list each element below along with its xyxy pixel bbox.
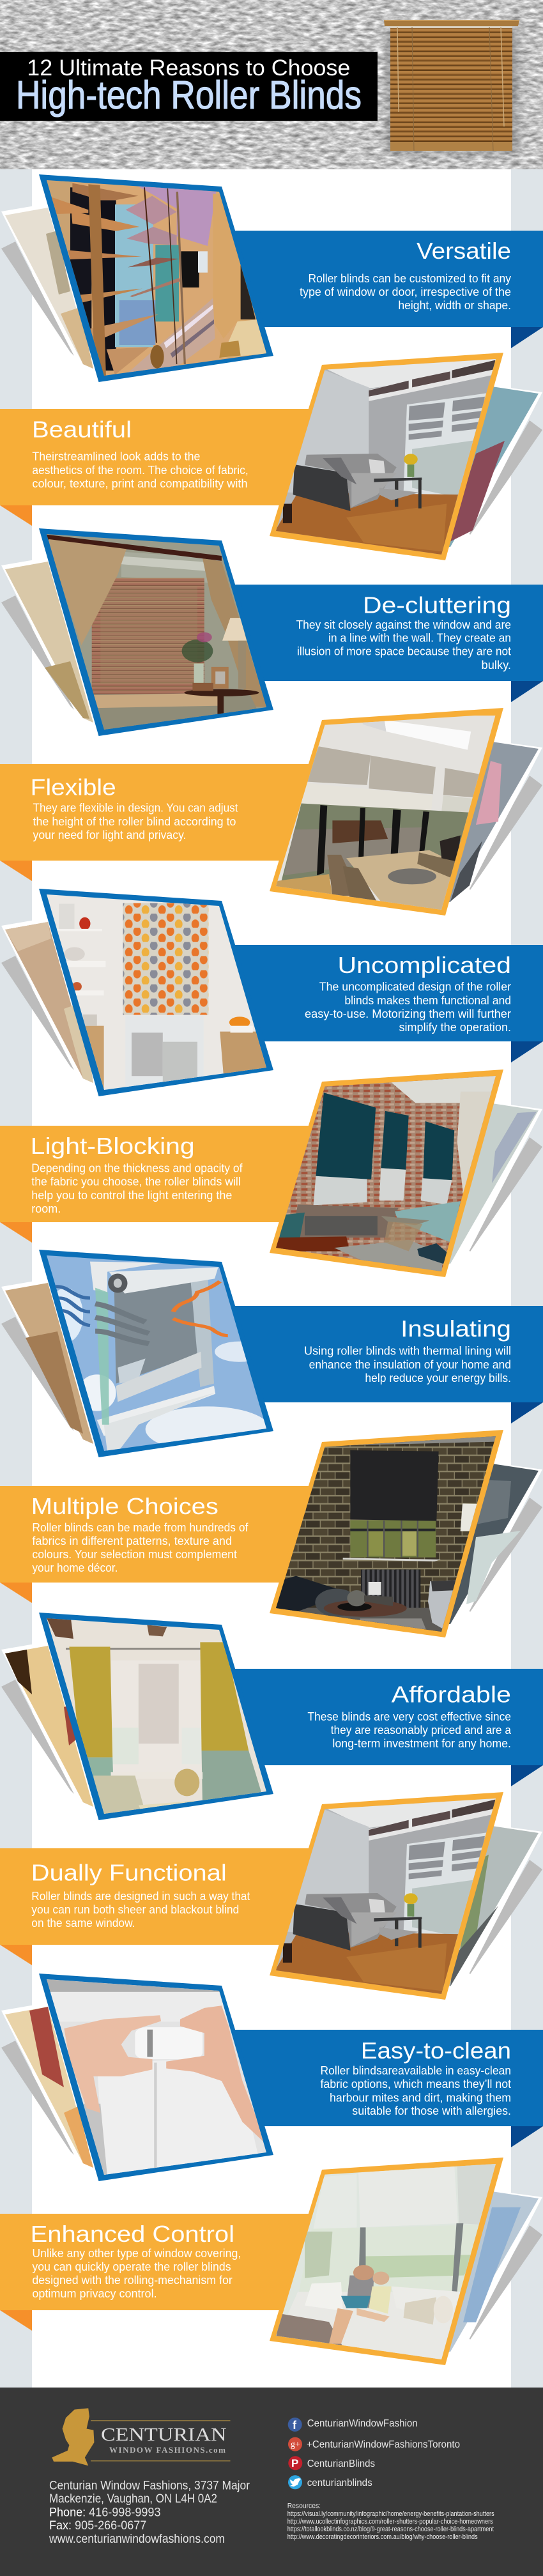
body text: designed with the rolling-mechanism for (32, 2274, 233, 2287)
body text: aesthetics of the room. The choice of fabric, (32, 464, 249, 477)
white content column (32, 169, 511, 2388)
body text: they are reasonably priced and are a (331, 1724, 512, 1736)
section 7: Insulating (1, 1250, 543, 1457)
title banner (0, 52, 378, 121)
heading: Dually Functional (31, 1859, 227, 1885)
heading: Affordable (392, 1681, 511, 1707)
back photo (434, 1824, 542, 1990)
heading: Enhanced Control (31, 2221, 234, 2247)
resources: Resources: (287, 2503, 321, 2510)
body text: Roller blinds can be customized to fit any (308, 272, 511, 285)
ribbon fold (511, 327, 543, 348)
social: facebook (288, 2418, 418, 2432)
heading: Uncomplicated (337, 952, 511, 978)
ribbon fold (0, 2310, 32, 2331)
body text: in a line with the wall. They create an (328, 632, 511, 645)
contact details (49, 2480, 250, 2546)
heading: Light-Blocking (31, 1133, 195, 1159)
back photo (1, 1642, 96, 1811)
body text (307, 1710, 512, 1750)
section 11: Easy-to-clean (1, 1974, 543, 2181)
back photo (1, 204, 96, 372)
orange ribbon (0, 1486, 313, 1583)
resources: http://www.ucollectinfographics.com/roller-shutters-popular-choice-homeowners (287, 2518, 493, 2526)
ribbon fold (511, 1765, 543, 1786)
body text: you can run both sheer and blackout blind (31, 1903, 239, 1916)
blue ribbon (230, 585, 543, 681)
section 4: Flexible (0, 708, 542, 916)
orange ribbon (0, 1126, 313, 1222)
body text: suitable for those with allergies. (352, 2104, 511, 2117)
body text (296, 618, 511, 671)
heading: Versatile (417, 238, 511, 264)
heading: Beautiful (32, 416, 132, 442)
orange ribbon (0, 2214, 313, 2310)
body text: easy-to-use. Motorizing them will further (305, 1008, 511, 1020)
social: pinterest: P (291, 2457, 298, 2469)
ribbon fold (511, 1041, 543, 1062)
body text: room. (31, 1202, 61, 1215)
section 2: Beautiful (0, 353, 542, 560)
front photo: living room (270, 353, 505, 560)
social: twitter: centurianblinds (307, 2478, 372, 2488)
body text (32, 1521, 249, 1574)
ribbon fold (511, 1402, 543, 1423)
section 10: Dually Functional (0, 1792, 542, 2000)
social: google plus (288, 2437, 460, 2451)
heading: De-cluttering (363, 592, 511, 618)
body text (304, 1345, 511, 1384)
body text: Roller blindsareavailable in easy-clean (321, 2064, 511, 2077)
section 12: Enhanced Control (0, 2158, 542, 2366)
body text: the fabric you choose, the roller blinds will (31, 1176, 241, 1188)
contact details: Mackenzie, Vaughan, ON L4H 0A2 (49, 2492, 217, 2506)
back photo (1, 918, 96, 1087)
heading: Easy-to-clean (361, 2037, 511, 2064)
front photo: hands fitting blind (39, 1974, 273, 2181)
icon: wooden blind (384, 20, 519, 155)
body text: help reduce your energy bills. (365, 1372, 511, 1384)
section 8: Multiple Choices (0, 1430, 542, 1642)
body text: Roller blinds are designed in such a way that (31, 1890, 250, 1903)
body text: on the same window. (31, 1917, 135, 1929)
front photo: dining room with roller shades (270, 708, 505, 916)
back photo (1, 1279, 96, 1448)
body text: long-term investment for any home. (332, 1737, 511, 1750)
social: google plus: +CenturianWindowFashionsToronto (307, 2439, 460, 2450)
resources (287, 2503, 494, 2541)
logo: WINDOW FASHIONS.com (109, 2445, 226, 2455)
body text: They are flexible in design. You can adjust (33, 802, 238, 815)
section 9: Affordable (1, 1613, 543, 1820)
orange ribbon (0, 1848, 313, 1945)
body text: the height of the roller blind according to (33, 815, 236, 828)
ribbon fold (0, 1945, 32, 1965)
body text (32, 2247, 241, 2300)
resources: https://visual.ly/community/infographic/home/energy-benefits-plantation-shutters (287, 2510, 494, 2518)
contact details: Fax: 905-266-0677 (49, 2519, 146, 2533)
back photo (434, 385, 542, 551)
body text: The uncomplicated design of the roller (319, 981, 511, 993)
contact details: Centurian Window Fashions, 3737 Major (49, 2480, 250, 2493)
front photo: yellow curtains with sheer blind (39, 1613, 273, 1820)
resources: https://totallookblinds.co.nz/blog/9-great-reasons-choose-roller-blinds-apartment (287, 2526, 494, 2533)
blue ribbon (230, 1306, 543, 1402)
blue ribbon (230, 231, 543, 327)
body text: Using roller blinds with thermal lining will (304, 1345, 511, 1358)
front photo: patterned roman blind in kitchen (39, 889, 273, 1096)
ribbon fold (0, 505, 32, 526)
resources: http://www.decoratingdecorinteriors.com.au/blog/why-choose-roller-blinds (287, 2533, 478, 2541)
body text (31, 1890, 250, 1929)
body text: your need for light and privacy. (33, 829, 187, 841)
front photo: wooden slats (39, 174, 277, 383)
front photo: living room (270, 1792, 505, 2000)
back photo (434, 1101, 542, 1268)
social: twitter (288, 2475, 372, 2489)
front photo: mother and child on white sofa (270, 2158, 505, 2366)
heading: Insulating (401, 1315, 511, 1342)
front photo: black blind on dark brick wall (268, 1430, 503, 1642)
heading: Multiple Choices (31, 1493, 218, 1519)
title banner: 12 Ultimate Reasons to Choose (27, 56, 350, 80)
back photo (434, 740, 542, 906)
body text (321, 2064, 511, 2117)
body text: Roller blinds can be made from hundreds of (32, 1521, 249, 1534)
body text: you can quickly operate the roller blinds (32, 2260, 231, 2273)
ribbon fold (0, 1222, 32, 1243)
contact details: www.centurianwindowfashions.com (49, 2533, 225, 2546)
orange ribbon (0, 409, 313, 505)
back photo (434, 2189, 542, 2356)
section 1: Versatile (1, 174, 543, 383)
social: facebook: CenturianWindowFashion (307, 2418, 418, 2429)
social: pinterest (288, 2456, 375, 2470)
body text: colours. Your selection must complement (32, 1548, 237, 1561)
social: pinterest: CenturianBlinds (307, 2458, 375, 2469)
body text: height, width or shape. (398, 299, 511, 312)
footer panel (0, 2388, 543, 2576)
section 6: Light-Blocking (0, 1070, 542, 1277)
body text: illusion of more space because they are not (297, 645, 511, 658)
body text (31, 1162, 243, 1215)
body text: fabric options, which means they’ll not (321, 2078, 511, 2090)
front photo: thermal blind diagram (39, 1250, 273, 1457)
body text: colour, texture, print and compatibility with (32, 477, 248, 490)
front photo: teal blackout blinds in brick loft (270, 1070, 505, 1277)
ribbon fold (0, 861, 32, 881)
body text (32, 450, 249, 490)
body text: Depending on the thickness and opacity of (31, 1162, 243, 1175)
orange ribbon (0, 764, 313, 861)
back photo (1, 558, 96, 726)
heading: Flexible (31, 774, 116, 800)
section 3: De-cluttering (1, 528, 543, 737)
body text: simplify the operation. (399, 1021, 511, 1034)
blue ribbon (230, 945, 543, 1041)
ribbon fold (511, 2126, 543, 2147)
body text: harbour mites and dirt, making them (330, 2091, 511, 2104)
body text: enhance the insulation of your home and (309, 1358, 511, 1371)
body text (305, 981, 511, 1034)
body text: type of window or door, irrespective of the (300, 286, 511, 298)
section 5: Uncomplicated (1, 889, 543, 1096)
back photo (1, 2003, 96, 2172)
body text: bulky. (482, 659, 511, 671)
front photo: curtains with wood blind (39, 528, 273, 737)
body text: They sit closely against the window and are (296, 618, 511, 631)
contact details: Phone: 416-998-9993 (49, 2506, 161, 2520)
body text: optimum privacy control. (32, 2287, 157, 2300)
body text (33, 802, 238, 841)
social: facebook: f (293, 2419, 297, 2432)
body text: Unlike any other type of window covering, (32, 2247, 241, 2260)
body text: blinds makes them functional and (344, 994, 511, 1007)
body text: help you to control the light entering the (31, 1189, 232, 1202)
title banner: High-tech Roller Blinds (16, 73, 362, 118)
body text: fabrics in different patterns, texture and (32, 1535, 232, 1547)
body text: These blinds are very cost effective since (307, 1710, 511, 1723)
blue ribbon (230, 2030, 543, 2126)
social: google plus: g+ (291, 2440, 300, 2450)
header: textured wall (0, 0, 543, 169)
body text: your home décor. (32, 1561, 118, 1574)
ribbon fold (511, 681, 543, 702)
back photo (434, 1462, 542, 1628)
logo (52, 2408, 230, 2465)
body text: Theirstreamlined look adds to the (32, 450, 200, 463)
blue ribbon (230, 1669, 543, 1765)
body text (300, 272, 511, 312)
logo: CENTURIAN (101, 2425, 226, 2445)
ribbon fold (0, 1583, 32, 1603)
